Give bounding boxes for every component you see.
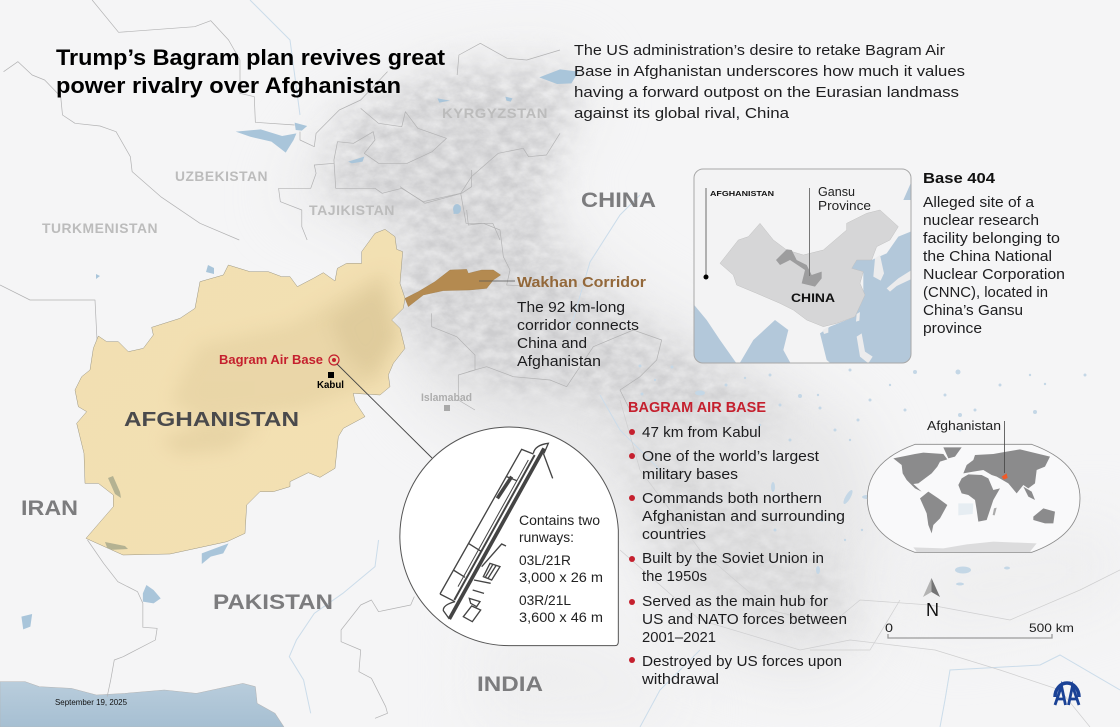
text block: Base 404: Base 404 <box>923 171 995 187</box>
inset: Gansu Province <box>776 249 822 287</box>
small lakes across the Himalaya and Tibet <box>638 364 1086 586</box>
country labels: UZBEKISTAN <box>175 168 268 184</box>
country labels: INDIA <box>477 673 543 696</box>
label: AFGHANISTAN: AFGHANISTAN <box>124 409 299 431</box>
marker: Kabul <box>317 372 344 391</box>
text block: Base 404: China’s Gansu <box>923 303 1023 319</box>
text: runway details: 3,000 x 26 m <box>519 570 603 585</box>
callout: Wakhan Corridor: corridor connects <box>517 318 639 334</box>
map: Wakhan Corridor <box>405 269 501 307</box>
scale bar: 0 <box>885 621 893 635</box>
callout: Wakhan Corridor: Afghanistan <box>517 354 601 370</box>
lakes <box>21 69 579 629</box>
title <box>56 45 446 98</box>
country labels: TAJIKISTAN <box>309 202 395 218</box>
text block: Base 404: (CNNC), located in <box>923 285 1048 301</box>
icon: north arrow: N <box>926 600 939 620</box>
callout: Wakhan Corridor: The 92 km-long <box>517 300 625 316</box>
date: September 19, 2025 <box>55 697 127 707</box>
text block: Base 404 <box>923 171 1065 337</box>
text block: Bagram Air Base facts: Served as the main hub for <box>642 594 828 610</box>
text block: Bagram Air Base facts: Afghanistan and surrounding <box>642 509 845 525</box>
rivers <box>250 0 1120 727</box>
country labels: IRAN <box>21 497 78 520</box>
country labels: TURKMENISTAN <box>42 220 158 236</box>
text block: Base 404: facility belonging to <box>923 231 1060 247</box>
text block: Bagram Air Base facts: military bases <box>642 467 738 483</box>
inset label: China: CHINA <box>791 293 835 305</box>
text: runway details: 3,600 x 46 m <box>519 610 603 625</box>
inset label: Afghanistan pointer <box>704 188 774 280</box>
text block: Base 404: province <box>923 321 982 337</box>
marker: Bagram Air Base: Bagram Air Base <box>219 353 323 367</box>
text: runway details: 03R/21L <box>519 593 571 608</box>
marker: Islamabad <box>421 392 472 411</box>
world map: Afghanistan highlight <box>1002 473 1008 480</box>
inset label: Gansu Province pointer <box>810 184 871 276</box>
country labels: PAKISTAN <box>213 591 333 614</box>
intro text: The US administration’s desire to retake Bagram Air <box>574 43 945 59</box>
world map: Afghanistan label <box>927 419 1004 473</box>
text block: Bagram Air Base facts: Destroyed by US forces upon <box>642 654 842 670</box>
world map: Afghanistan label: Afghanistan <box>927 419 1001 433</box>
sea: Arabian Sea <box>0 682 284 727</box>
text block: Bagram Air Base facts: BAGRAM AIR BASE <box>628 400 766 416</box>
text block: Base 404: Alleged site of a <box>923 195 1035 211</box>
panel: China locator map <box>690 169 917 368</box>
text block: Bagram Air Base facts: withdrawal <box>641 672 719 688</box>
intro text: having a forward outpost on the Eurasian landmass <box>574 85 959 101</box>
intro text <box>574 43 965 122</box>
scale bar <box>885 621 1074 638</box>
text: runway details: 03L/21R <box>519 553 571 568</box>
leader line to callout <box>337 364 432 458</box>
country labels <box>21 105 656 696</box>
text block: Bagram Air Base facts: Built by the Soviet Union in <box>642 551 824 567</box>
text block: Bagram Air Base facts: 2001–2021 <box>642 630 716 646</box>
intro text: against its global rival, China <box>574 106 790 122</box>
logo: Anadolu Agency <box>1055 683 1079 705</box>
text block: Base 404: Nuclear Corporation <box>923 267 1065 283</box>
text block: Bagram Air Base facts: countries <box>642 527 706 543</box>
map: Afghanistan <box>75 229 501 555</box>
callout: Wakhan Corridor <box>479 274 646 370</box>
scale bar: 500 km <box>1029 621 1074 635</box>
text block: Bagram Air Base facts: US and NATO forces between <box>642 612 847 628</box>
text block: Bagram Air Base facts: One of the world’s largest <box>642 449 819 465</box>
inset land: islands <box>823 255 911 363</box>
text block: Bagram Air Base facts: the 1950s <box>642 569 707 585</box>
title: Trump’s Bagram plan revives great <box>56 45 446 70</box>
title: power rivalry over Afghanistan <box>56 73 401 98</box>
country labels: KYRGYZSTAN <box>442 105 548 121</box>
text: runway details: runways: <box>519 530 574 545</box>
inset label: Gansu Province pointer: Province <box>818 198 871 213</box>
icon: north arrow <box>923 578 940 620</box>
text: runway details: Contains two <box>519 513 600 528</box>
text block: Bagram Air Base facts <box>628 400 847 688</box>
icon: runway diagram <box>440 443 553 622</box>
inset label: Gansu Province pointer: Gansu <box>818 184 855 199</box>
marker: Islamabad: Islamabad <box>421 392 472 404</box>
country labels: CHINA <box>581 189 656 212</box>
text: runway details <box>519 513 603 625</box>
inset sea <box>690 183 917 368</box>
text block: Base 404: nuclear research <box>923 213 1039 229</box>
callout: Wakhan Corridor: China and <box>517 336 587 352</box>
intro text: Base in Afghanistan underscores how much it values <box>574 64 965 80</box>
panel: world locator map <box>867 419 1080 552</box>
inset: China territory <box>720 210 898 327</box>
text block: Bagram Air Base facts: 47 km from Kabul <box>642 425 761 441</box>
marker: Kabul: Kabul <box>317 380 344 391</box>
inset label: Afghanistan pointer: AFGHANISTAN <box>710 189 774 198</box>
callout: airfield runway plan <box>400 427 618 646</box>
text block: Bagram Air Base facts: Commands both northern <box>642 491 822 507</box>
callout: Wakhan Corridor: Wakhan Corridor <box>517 274 646 291</box>
text block: Base 404: the China National <box>923 249 1052 265</box>
